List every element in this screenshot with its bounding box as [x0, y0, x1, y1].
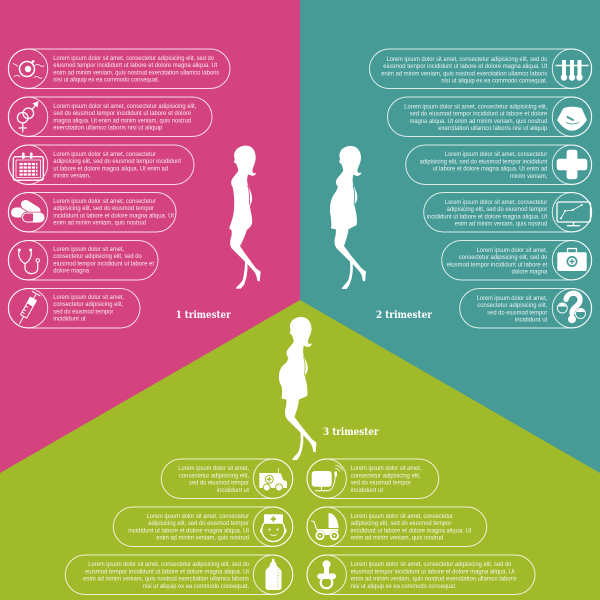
silhouette: woman third trimester — [279, 317, 316, 460]
pill outline — [307, 555, 535, 594]
icon: baby monitor — [312, 466, 342, 491]
silhouette: woman second trimester — [330, 146, 366, 289]
icon circle — [253, 459, 293, 498]
text block: adipisicing elit, sed do eiusmod tempor — [351, 520, 452, 527]
text block: Lorem ipsum dolor sit amet, — [477, 247, 547, 254]
item: right row 5 — [442, 240, 592, 280]
text block: consectetur adipisicing elit, sed do — [53, 253, 142, 260]
text block: sed do eiusmod tempor incididunt ut labore et dolore — [410, 111, 548, 118]
icon: egg and sperm — [13, 60, 44, 78]
item: left row 5 — [8, 240, 158, 280]
text block: enim ad minim veniam, quis nostrud — [351, 535, 444, 542]
text block — [351, 513, 472, 542]
silhouette: woman first trimester — [229, 146, 261, 289]
text block: Lorem ipsum dolor sit amet, — [178, 465, 249, 472]
text block — [351, 465, 422, 494]
text block: enim ad minim veniam, quis nostrud — [53, 220, 146, 227]
text block: enim ad minim veniam, quis nostrud — [156, 535, 249, 542]
icon circle — [8, 288, 48, 328]
text block: adipisicing elit, sed do eiusmod tempor incididunt — [53, 158, 181, 165]
text block: eiusmod tempor incididunt ut labore et dolore magna aliqua. Ut — [53, 62, 217, 69]
item: right row 1 — [370, 49, 592, 88]
icon: stethoscope — [18, 248, 40, 274]
text block: minim veniam, — [510, 173, 547, 180]
text block: incididunt ut — [351, 487, 383, 494]
text block: incididunt ut — [217, 487, 249, 494]
icon: gender symbols — [17, 101, 38, 132]
icon circle — [307, 459, 346, 498]
text block: Lorem ipsum dolor sit amet, consectetur — [147, 513, 250, 520]
pill outline — [113, 507, 293, 546]
pill outline — [8, 240, 158, 280]
text block: magna aliqua. Ut enim ad minim veniam, quis nostrud — [410, 118, 548, 125]
icon: pacifier — [317, 560, 336, 588]
icon: calendar — [13, 152, 43, 180]
text block: dolore magna — [512, 269, 548, 276]
text block: Lorem ipsum dolor sit amet, consectetur adipisicing elit, sed do — [88, 561, 249, 568]
text block — [447, 247, 548, 276]
icon circle — [307, 507, 346, 546]
label: 1 trimester: 1 trimester — [176, 310, 231, 321]
text block: Lorem ipsum dolor sit amet, — [477, 295, 547, 302]
text block — [427, 199, 548, 228]
icon: baby stroller — [312, 513, 339, 540]
pill outline — [161, 459, 293, 498]
text block: incididunt ut — [515, 317, 547, 324]
text block: magna aliqua. Ut enim ad minim veniam, quis nostrud — [53, 117, 191, 124]
text block: eiusmod tempor incididunt ut labore et — [447, 261, 547, 268]
text block: incididunt ut labore et dolore magna aliqua. Ut — [53, 212, 174, 219]
text block — [53, 55, 220, 84]
pill outline — [65, 555, 293, 594]
text block: dolore magna — [53, 268, 89, 275]
text block: enim ad minim veniam, quis nostrud exercitation ullamco laboris — [53, 69, 220, 76]
icon: ultrasound — [557, 107, 587, 131]
icon: baby with nurse cap — [260, 514, 286, 542]
icon circle — [552, 97, 592, 136]
text block — [53, 198, 174, 227]
pill outline — [8, 288, 140, 328]
icon: monitor with chart — [557, 202, 590, 226]
text block: sed do eiusmod tempor — [351, 480, 411, 487]
text block: sed do eiusmod tempor — [189, 480, 250, 487]
text block: enim ad minim veniam, quis nostrud exercitation ullamco laboris — [381, 70, 548, 77]
item: bottom right row 2 — [307, 507, 487, 546]
pill outline — [460, 288, 592, 328]
text block: consectetur adipisicing elit, — [179, 472, 249, 479]
text block: Lorem ipsum dolor sit amet, consectetur — [53, 198, 156, 205]
panel: third trimester background — [0, 300, 600, 600]
text block — [83, 561, 250, 590]
text block — [351, 561, 517, 590]
icon: first aid kit — [557, 248, 587, 271]
text block: adipisicing elit, sed do eiusmod tempor — [53, 205, 155, 212]
icon circle — [253, 555, 293, 594]
icon circle — [307, 555, 346, 594]
item: right row 2 — [388, 97, 592, 136]
icon circle — [552, 145, 592, 184]
text block: Lorem ipsum dolor sit amet, consectetur adipisicing elit, — [53, 103, 196, 110]
icon: pills — [11, 204, 44, 222]
icon circle — [552, 241, 592, 280]
text block — [53, 294, 124, 323]
icon circle — [552, 49, 592, 88]
text block: adipisicing elit, sed do eiusmod tempor — [447, 206, 548, 213]
icon circle — [8, 145, 48, 184]
icon circle — [8, 49, 48, 88]
item: right row 3 — [406, 145, 592, 184]
text block: Lorem ipsum dolor sit amet, — [53, 294, 124, 301]
text block: eiusmod tempor incididunt ut labore et dolore magna aliqua. Ut — [85, 568, 249, 575]
pill outline — [370, 49, 592, 88]
text block — [404, 104, 548, 132]
icon circle — [552, 288, 592, 328]
text block: Lorem ipsum dolor sit amet, — [351, 465, 422, 472]
item: right row 4 — [424, 192, 592, 232]
text block — [477, 295, 548, 324]
text block: enim ad minim veniam, quis nostrud — [455, 221, 548, 228]
item: left row 1 — [8, 49, 230, 88]
pill outline — [8, 145, 194, 184]
text block: enim ad minim veniam, quis nostrud exercitation ullamco laboris — [351, 576, 517, 583]
icon circle — [552, 192, 592, 232]
text block: eiusmod tempor incididunt ut labore et dolore magna aliqua. Ut — [383, 63, 547, 70]
text block: Lorem ipsum dolor sit amet, consectetur adipisicing elit, sed do — [351, 561, 512, 568]
icon: medical cross — [557, 150, 587, 179]
text block: nisi ut aliquip ex ea commodo consequat. — [53, 77, 159, 84]
text block: minim veniam, — [53, 173, 91, 180]
pill outline — [8, 97, 212, 136]
text block: Lorem ipsum dolor sit amet, consectetur adipisicing elit, sed do — [387, 56, 548, 63]
icon circle — [8, 241, 48, 280]
pill outline — [388, 97, 592, 136]
pill outline — [406, 145, 592, 184]
text block: incididunt ut labore et dolore magna aliqua. Ut — [128, 527, 249, 534]
text block: ut labore et dolore magna aliqua. Ut enim ad — [433, 166, 548, 173]
icon: ambulance — [259, 468, 287, 491]
item: bottom right row 1 — [307, 459, 439, 498]
text block: enim ad minim veniam, quis nostrud exercitation ullamco laboris — [83, 576, 250, 583]
text block: incididunt ut labore et dolore magna aliqua. Ut — [427, 213, 547, 220]
text block — [53, 103, 196, 132]
icon: test tubes — [556, 60, 588, 81]
text block: consectetur adipisicing elit, — [351, 472, 421, 479]
text block: exercitation ullamco laboris nisi ut aliquip — [438, 125, 548, 132]
text block: nisi ut aliquip ex ea commodo consequat. — [351, 583, 457, 590]
pill outline — [307, 459, 439, 498]
item: right row 6 — [460, 288, 592, 328]
label: 3 trimester: 3 trimester — [323, 427, 379, 438]
pill outline — [307, 507, 487, 546]
text block: adipisicing elit, sed do eiusmod tempor incididunt — [420, 158, 547, 165]
text block: consectetur adipisicing elit, sed do — [459, 254, 548, 261]
text block — [128, 513, 250, 542]
text block: sed do eiusmod tempor incididunt ut labore et dolore — [53, 110, 191, 117]
icon: question mark with babies — [557, 293, 586, 323]
icon circle — [8, 97, 48, 136]
icon circle — [253, 507, 293, 546]
text block — [381, 56, 548, 85]
text block: consectetur adipisicing elit, — [53, 301, 123, 308]
item: left row 2 — [8, 97, 212, 136]
item: left row 6 — [8, 288, 140, 328]
text block: Lorem ipsum dolor sit amet, consectetur adipisicing elit, — [404, 104, 547, 110]
pill outline — [8, 49, 230, 88]
text block — [53, 151, 181, 180]
text block: incididunt ut labore et dolore magna aliqua. Ut — [351, 527, 472, 534]
text block: Lorem ipsum dolor sit amet, consectetur — [445, 199, 548, 206]
item: left row 3 — [8, 145, 194, 184]
item: bottom left row 2 — [113, 507, 293, 546]
text block: eiusmod tempor incididunt ut labore et dolore magna aliqua. Ut — [351, 568, 515, 575]
panel: first trimester background — [0, 0, 300, 600]
text block: adipisicing elit, sed do eiusmod tempor — [148, 520, 250, 527]
text block: Lorem ipsum dolor sit amet, consectetur — [445, 151, 548, 158]
text block: sed do eiusmod tempor — [487, 309, 548, 316]
label: 2 trimester: 2 trimester — [376, 310, 433, 321]
text block: exercitation ullamco laboris nisi ut aliquip — [53, 125, 163, 132]
text block: nisi ut aliquip ex ea commodo consequat. — [143, 583, 249, 590]
text block: Lorem ipsum dolor sit amet, consectetur — [351, 513, 454, 520]
text block: ut labore et dolore magna aliqua. Ut enim ad — [53, 165, 168, 172]
item: bottom right row 3 — [307, 555, 535, 594]
pill outline — [442, 240, 592, 280]
icon: baby bottle — [266, 558, 282, 590]
text block: eiusmod tempor incididunt ut labore et — [53, 260, 154, 267]
text block: nisi ut aliquip ex ea commodo consequat. — [441, 78, 547, 85]
text block: consectetur adipisicing elit, — [477, 302, 547, 309]
item: bottom left row 3 — [65, 555, 293, 594]
text block: Lorem ipsum dolor sit amet, — [53, 246, 124, 253]
text block — [178, 465, 250, 494]
panel: second trimester background — [300, 0, 600, 600]
icon circle — [8, 192, 48, 232]
pill outline — [8, 192, 176, 232]
text block: sed do eiusmod tempor — [53, 308, 114, 315]
icon: syringe — [16, 291, 40, 326]
text block — [420, 151, 548, 180]
text block: Lorem ipsum dolor sit amet, consectetur — [53, 151, 156, 158]
pill outline — [424, 192, 592, 232]
text block: incididunt ut — [53, 316, 86, 323]
text block: Lorem ipsum dolor sit amet, consectetur adipisicing elit, sed do — [53, 55, 214, 62]
text block — [53, 246, 154, 275]
item: bottom left row 1 — [161, 459, 293, 498]
item: left row 4 — [8, 192, 176, 232]
